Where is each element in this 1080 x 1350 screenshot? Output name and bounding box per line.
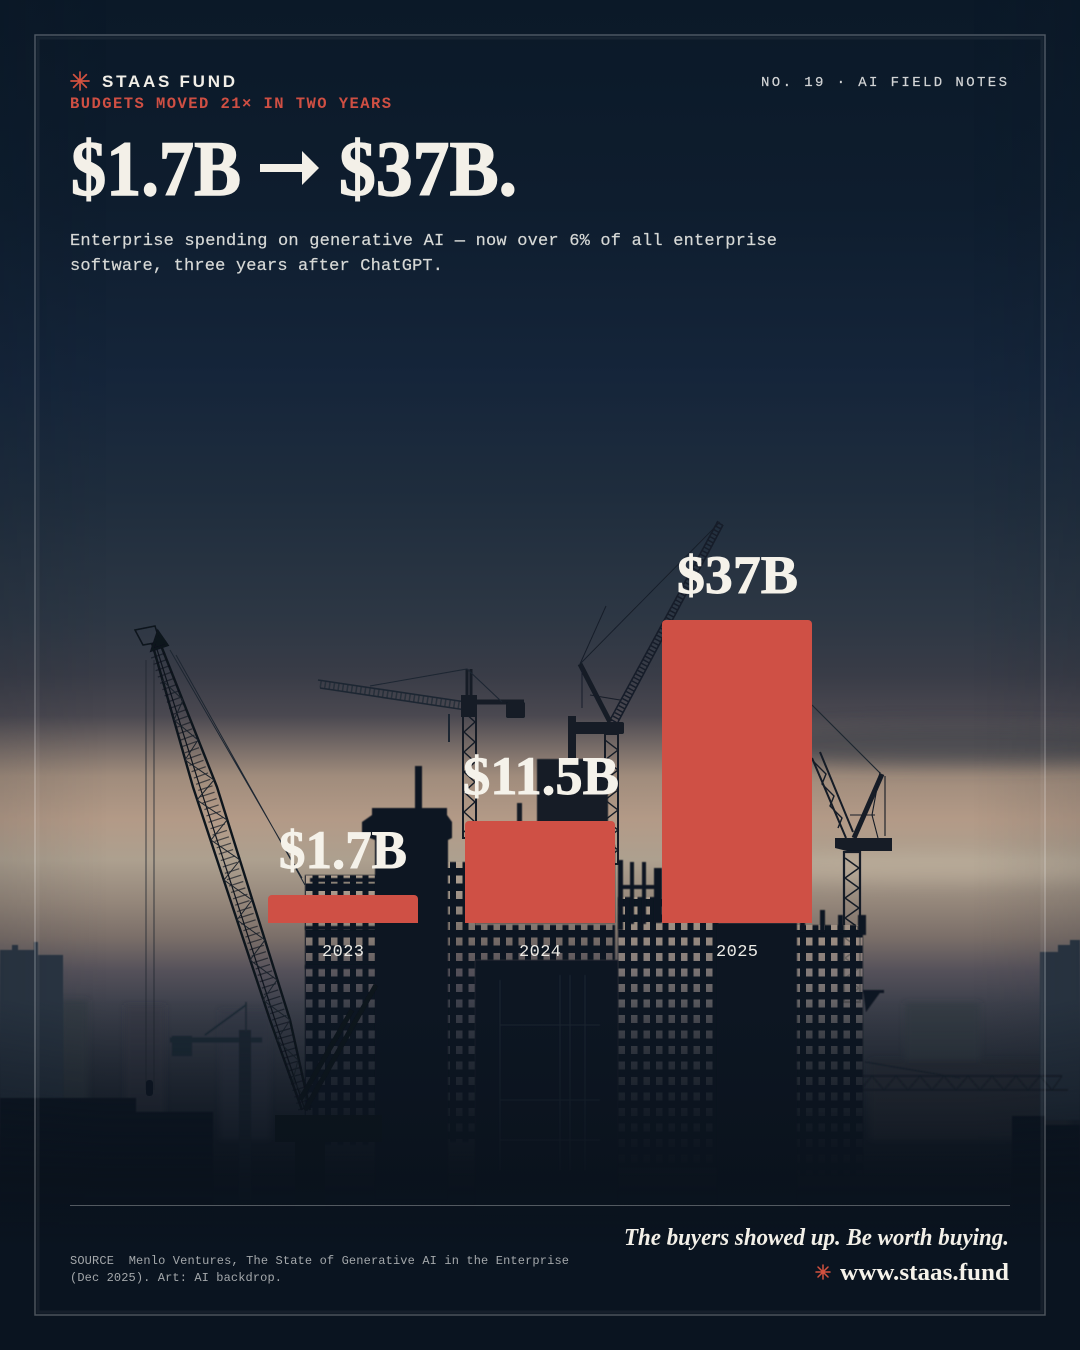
source note: SOURCE Menlo Ventures, The State of Generative AI in the Enterprise [70, 1254, 569, 1268]
bar 2023 [268, 820, 418, 962]
bar 2025 [662, 545, 812, 962]
subtitle: Enterprise spending on generative AI — now over 6% of all enterprise [70, 232, 777, 251]
header: brand: STAAS FUND [102, 72, 235, 91]
bar 2024: $11.5B [463, 746, 619, 806]
footer [70, 1206, 1010, 1286]
icon: footer asterisk [816, 1265, 830, 1279]
background: right luffing crane behind bar [568, 521, 723, 864]
background: near dark rooftops [0, 1098, 1080, 1350]
subtitle: software, three years after ChatGPT. [70, 257, 443, 276]
background: light behind scaffolding [305, 862, 863, 1115]
background: distant hazy skyline [60, 1000, 1070, 1140]
background: left distant crane [170, 1002, 262, 1200]
background: right distant lattice jib [860, 1062, 1068, 1090]
source note [70, 1254, 569, 1285]
bar 2023: 2023 [322, 943, 364, 962]
background: rear block tower [517, 759, 608, 825]
background: solid building core [305, 766, 884, 1215]
bar 2024: 2024 [519, 943, 561, 962]
subtitle [70, 232, 777, 276]
title: $37B. [339, 125, 517, 212]
title: $1.7B [71, 125, 241, 212]
background: foreground side buildings [0, 940, 1080, 1135]
bar 2024 [463, 746, 619, 962]
background: lower fade [0, 1000, 1080, 1350]
tagline: The buyers showed up. Be worth buying. [624, 1225, 1009, 1251]
bar 2023: $1.7B [279, 820, 407, 880]
background: center tower crane [318, 669, 525, 838]
bar 2025: $37B [677, 545, 798, 605]
background: foreground crawler crane boom [135, 626, 382, 1212]
background: far-right tower crane [812, 705, 892, 1002]
header: issue label: NO. 19 · AI FIELD NOTES [761, 75, 1007, 91]
title [71, 125, 517, 212]
arrow [260, 151, 319, 185]
eyebrow: BUDGETS MOVED 21× IN TWO YEARS [70, 95, 391, 113]
background: scaffolding tower frames [304, 861, 864, 1120]
icon: brand asterisk [71, 72, 89, 90]
bar chart [268, 545, 812, 962]
background: faint grid on central core [500, 975, 600, 1170]
website: www.staas.fund [840, 1260, 1010, 1286]
source note: (Dec 2025). Art: AI backdrop. [70, 1271, 282, 1285]
bar 2025: 2025 [716, 943, 758, 962]
